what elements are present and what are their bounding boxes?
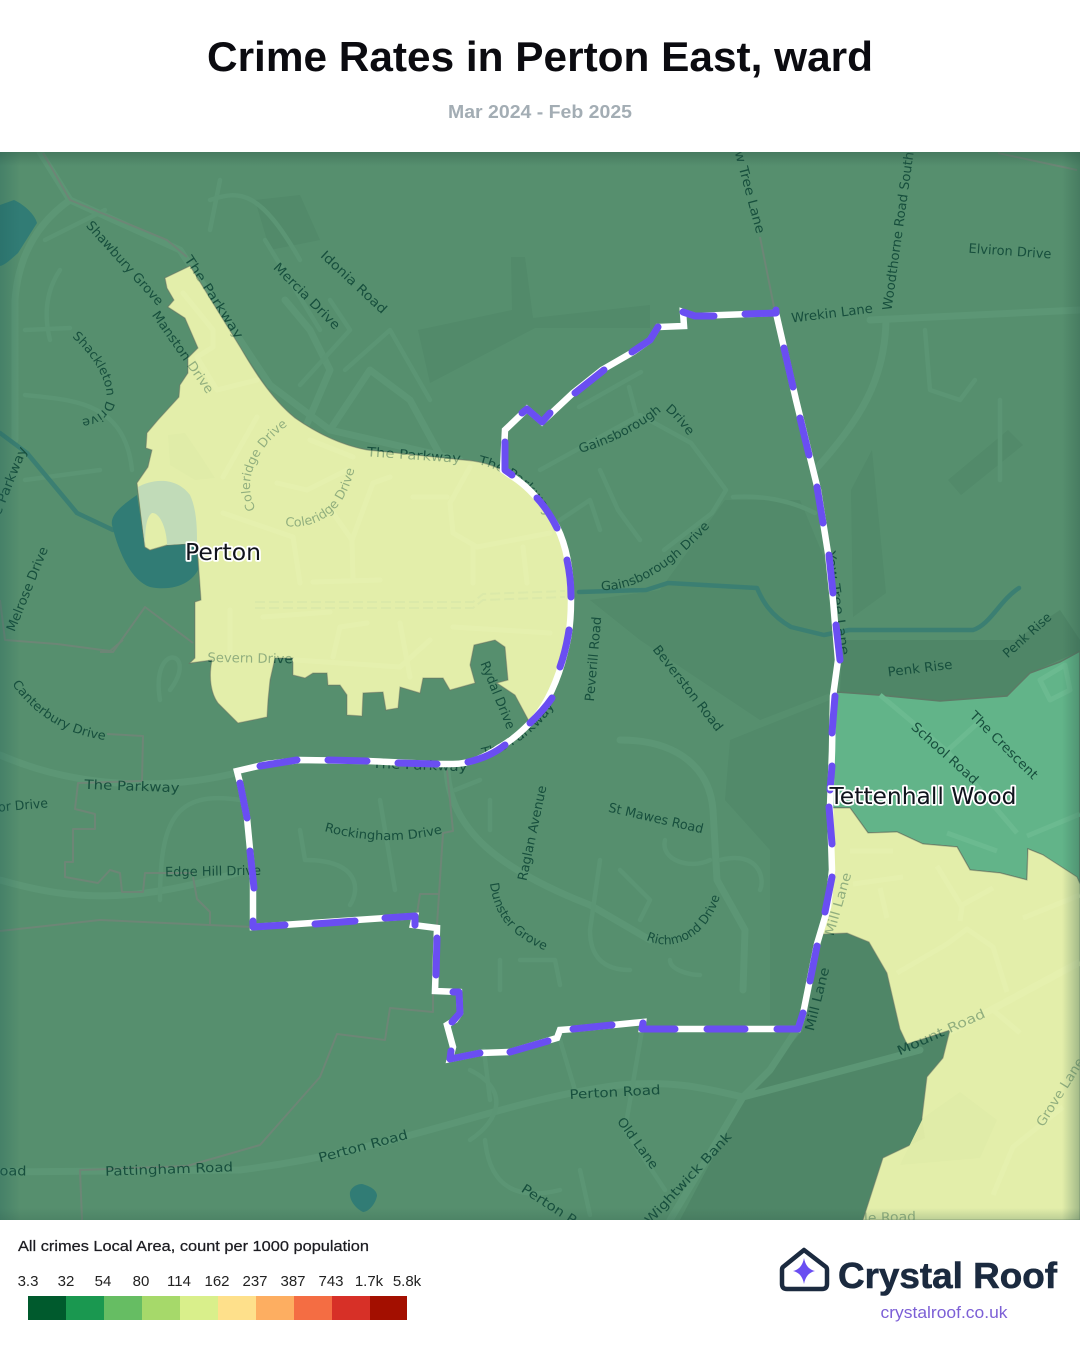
street labels: The Parkway bbox=[365, 445, 462, 467]
street labels: le Road bbox=[864, 1210, 916, 1226]
street labels: School Road bbox=[908, 720, 981, 788]
roads in Tettenhall Wood bbox=[880, 665, 1080, 851]
legend scale values: 114 bbox=[167, 1273, 191, 1290]
street labels: Mercia Drive bbox=[270, 260, 343, 333]
legend scale values: 1.7k bbox=[355, 1273, 384, 1290]
street labels: Canterbury Drive bbox=[14, 680, 105, 740]
street labels: Dunster Grove bbox=[490, 883, 546, 950]
street labels: The Crescent bbox=[965, 708, 1040, 783]
grey administrative boundaries bbox=[0, 153, 1077, 1220]
street labels: Old Lane bbox=[613, 1115, 661, 1172]
region: Tettenhall Wood medium-low crime bbox=[830, 651, 1080, 884]
street labels: Mill Lane bbox=[823, 871, 855, 938]
legend scale values: 162 bbox=[204, 1273, 230, 1290]
street labels: Idonia Road bbox=[317, 248, 389, 317]
street labels: Rydal Drive bbox=[477, 659, 517, 732]
brand logo bbox=[782, 1250, 1058, 1322]
street labels: Coleridge Drive bbox=[286, 468, 354, 527]
street labels: Melrose Drive bbox=[4, 545, 52, 634]
water: streams bbox=[0, 433, 1019, 635]
street labels: The Parkway bbox=[83, 778, 180, 796]
street labels: Coleridge Drive bbox=[241, 421, 287, 511]
street labels: The Parkway bbox=[480, 706, 554, 752]
street labels: Perton Road bbox=[317, 1128, 410, 1166]
street labels: Mount Road bbox=[895, 1007, 988, 1059]
street labels: Mill Lane bbox=[803, 966, 833, 1033]
street labels: Manston Drive bbox=[148, 309, 216, 397]
brand url: crystalroof.co.uk bbox=[880, 1304, 1008, 1322]
south-east yellow darker patch bbox=[910, 1118, 926, 1146]
title: Crime Rates in Perton East, ward bbox=[207, 33, 873, 80]
Perton disused rail dashes bbox=[255, 591, 565, 608]
darker land patches bbox=[255, 195, 1023, 1025]
street labels: The Parkway bbox=[371, 757, 468, 775]
street labels: Rockingham Drive bbox=[325, 822, 442, 842]
roads in Perton bbox=[292, 658, 294, 662]
legend scale values: 80 bbox=[133, 1273, 149, 1290]
translucent overlay fading labels on high-crime regions bbox=[137, 266, 1080, 1220]
street labels: Shackleton Drive bbox=[73, 332, 115, 426]
street labels: Gainsborough Drive bbox=[579, 404, 692, 452]
legend scale values: 237 bbox=[242, 1273, 268, 1290]
legend scale values: 387 bbox=[280, 1273, 306, 1290]
street labels: Woodthorne Road South bbox=[880, 151, 918, 311]
street labels: Perton Road bbox=[518, 1182, 603, 1244]
street labels: w Tree Lane bbox=[731, 149, 767, 235]
water: reservoirs and ponds bbox=[0, 200, 377, 1212]
street labels: Edge Hill Drive bbox=[165, 864, 261, 880]
legend scale values: 32 bbox=[58, 1273, 74, 1290]
legend scale values: 54 bbox=[95, 1273, 111, 1290]
region: south-east higher crime bbox=[823, 808, 1080, 1220]
legend scale values: 5.8k bbox=[393, 1273, 422, 1290]
street labels: Pattingham Road bbox=[105, 1160, 233, 1180]
ward boundary: white base line bbox=[237, 312, 838, 1059]
road network bbox=[728, 1042, 924, 1129]
street labels: The Parkway bbox=[480, 455, 547, 515]
legend colour bar bbox=[28, 1296, 407, 1320]
street labels: The Parkway bbox=[180, 252, 246, 342]
Perton darker patch bbox=[168, 433, 215, 480]
map edge vignette bbox=[0, 152, 1080, 1220]
dark land: Penk Rise band and south of Mill Lane bbox=[680, 610, 1080, 1220]
street labels: Penk Rise bbox=[1000, 610, 1055, 661]
street labels: Wrekin Lane bbox=[791, 302, 874, 326]
roads in south-east region bbox=[948, 894, 1080, 1032]
legend scale values: 3.3 bbox=[18, 1273, 38, 1290]
street labels: Raglan Avenue bbox=[516, 784, 550, 882]
street labels: Perton Road bbox=[569, 1083, 661, 1103]
legend bbox=[18, 1238, 422, 1320]
place label: Perton: Perton bbox=[185, 540, 261, 566]
legend scale values bbox=[18, 1273, 422, 1290]
street labels: Shawbury Grove bbox=[83, 219, 166, 309]
subtitle: date range: Mar 2024 - Feb 2025 bbox=[448, 101, 632, 122]
place label: Tettenhall Wood: Tettenhall Wood bbox=[828, 784, 1016, 810]
street labels: Yew Tree Lane bbox=[822, 549, 852, 656]
street labels: Penk Rise bbox=[887, 658, 953, 680]
icon: house with star bbox=[782, 1250, 827, 1289]
street labels: Richmond Drive bbox=[647, 896, 720, 944]
brand name: Crystal Roof bbox=[838, 1255, 1058, 1296]
street labels: Severn Drive bbox=[207, 651, 293, 667]
street labels: Peverill Road bbox=[583, 616, 605, 702]
street labels: Gainsborough Drive bbox=[602, 523, 709, 590]
pale lake patch inside Perton bbox=[138, 481, 197, 547]
street labels: Wightwick Bank bbox=[642, 1129, 736, 1228]
street labels: oad bbox=[0, 1165, 27, 1180]
legend title: All crimes Local Area, count per 1000 population bbox=[18, 1238, 369, 1255]
region: Perton higher crime bbox=[137, 266, 571, 723]
ward boundary: purple dashes bbox=[240, 310, 840, 1059]
street labels: Beverston Road bbox=[649, 643, 725, 735]
street labels: St Mawes Road bbox=[607, 801, 705, 837]
base map: low crime area bbox=[0, 152, 1080, 1220]
street labels: Elviron Drive bbox=[968, 242, 1052, 262]
legend scale values: 743 bbox=[318, 1273, 344, 1290]
